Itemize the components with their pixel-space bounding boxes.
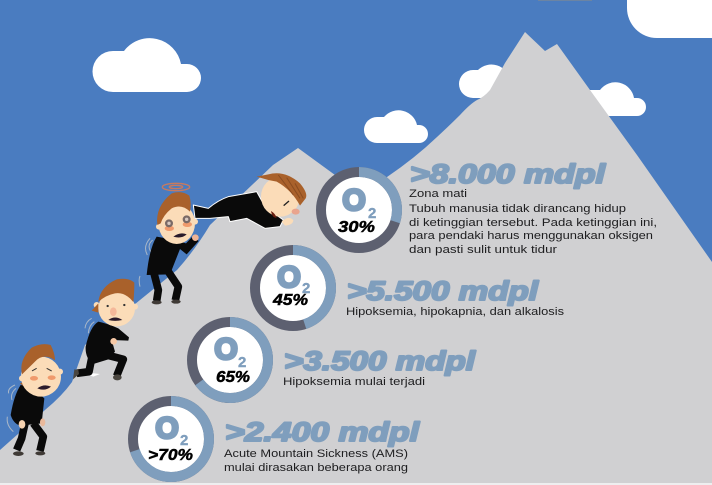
cloud: large left: [92, 38, 201, 92]
cloud: behind peak left: [459, 65, 510, 98]
gauge: 65 percent: 2: [238, 354, 246, 371]
gauge: 30 percent: 30%: [338, 219, 375, 236]
cloud: top right: [627, 0, 712, 38]
icon: dizzy swirl: [162, 183, 190, 191]
gauge: 30 percent: [321, 172, 397, 248]
heading: 5500: >5.500 mdpl: [347, 276, 539, 306]
gauge: 70 percent: 2: [180, 432, 188, 449]
gauge: 65 percent: [192, 322, 268, 398]
gauge: 65 percent: O: [214, 333, 238, 366]
gauge: 65 percent: 65%: [216, 369, 250, 386]
gauge: 70 percent: >70%: [148, 447, 193, 464]
gauge: 70 percent: [133, 401, 209, 477]
text block: 3500 effects: Hipoksemia mulai terjadi: [283, 376, 425, 388]
text block: death zone: [409, 188, 657, 256]
gauge: 45 percent: 45%: [272, 292, 308, 309]
text block: death zone: Zona mati: [409, 188, 467, 200]
text block: death zone: dan pasti sulit untuk tidur: [409, 244, 557, 256]
cloud: small centre: [364, 110, 428, 143]
text block: death zone: Tubuh manusia tidak dirancang hidup: [409, 203, 626, 215]
text block: death zone: para pendaki harus menggunakan oksigen: [409, 230, 653, 242]
gauge: 45 percent: O: [277, 261, 301, 294]
text block: 2400 effects: [224, 448, 408, 474]
gauge: 45 percent: [255, 250, 331, 326]
text block: 2400 effects: mulai dirasakan beberapa orang: [224, 462, 408, 474]
heading: 3500: >3.500 mdpl: [284, 346, 476, 376]
gauge: 30 percent: O: [342, 184, 366, 217]
cloud: top edge: [538, 0, 592, 1]
gauge: 45 percent: 2: [302, 280, 310, 297]
gauge: 70 percent: O: [155, 412, 179, 445]
figure: bottom climber: [7, 344, 63, 456]
text block: 2400 effects: Acute Mountain Sickness (AMS): [224, 448, 408, 460]
heading: 2400: >2.400 mdpl: [225, 417, 420, 447]
gauge: 30 percent: 2: [368, 205, 376, 222]
figure: dizzy climber: [146, 183, 199, 304]
heading: 8000: >8.000 mdpl: [410, 159, 606, 189]
cloud: behind peak right: [585, 82, 646, 116]
figure: collapsed climber: [193, 173, 306, 228]
text block: death zone: di ketinggian tersebut. Pada ketinggian ini,: [409, 217, 657, 229]
text block: 5500 effects: Hipoksemia, hipokapnia, dan alkalosis: [346, 306, 565, 318]
figure: second climber: [73, 276, 140, 380]
